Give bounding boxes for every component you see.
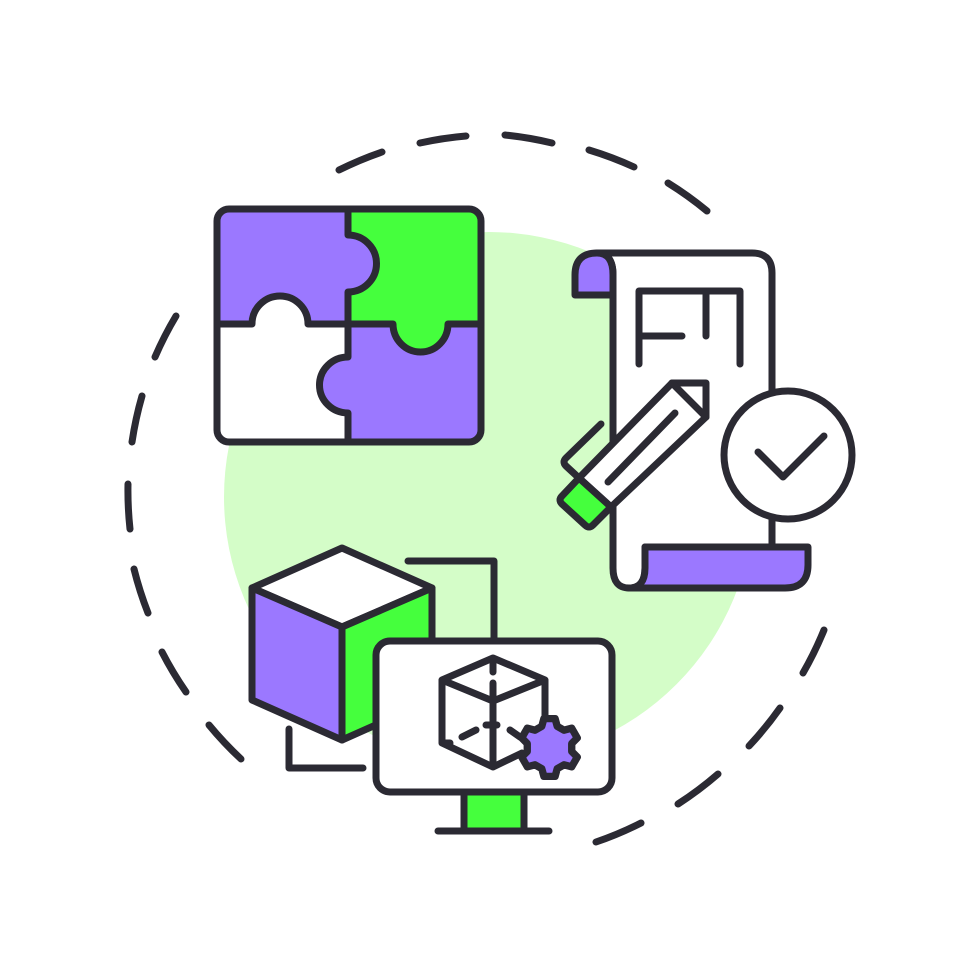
pencil eraser xyxy=(560,478,611,527)
monitor stand xyxy=(464,792,524,831)
cube left face xyxy=(252,588,342,740)
icon: document with pencil and check xyxy=(560,253,852,588)
gear xyxy=(522,719,577,776)
check mark xyxy=(758,436,824,477)
background light green circle xyxy=(224,232,754,762)
document sheet xyxy=(597,253,772,588)
pencil body xyxy=(579,383,706,507)
icon: 3D cube and monitor xyxy=(252,548,612,831)
puzzle piece: top left purple xyxy=(217,209,376,324)
connector lines xyxy=(289,561,494,768)
monitor screen xyxy=(376,641,612,792)
monitor base xyxy=(438,828,549,834)
check badge xyxy=(724,391,852,519)
scroll bottom fold xyxy=(629,547,808,588)
document text lines xyxy=(639,291,740,364)
pencil details xyxy=(564,383,706,482)
puzzle outlines xyxy=(217,209,481,442)
dashed outer ring xyxy=(128,135,824,842)
puzzle piece: bottom right purple xyxy=(320,324,481,442)
scroll top tab xyxy=(575,253,613,295)
cube right face xyxy=(342,588,432,740)
cube top face xyxy=(252,548,432,627)
wireframe cube xyxy=(442,658,545,767)
icon: puzzle xyxy=(217,209,481,442)
puzzle piece: top right green xyxy=(348,209,481,352)
puzzle piece: bottom left white xyxy=(217,296,348,442)
